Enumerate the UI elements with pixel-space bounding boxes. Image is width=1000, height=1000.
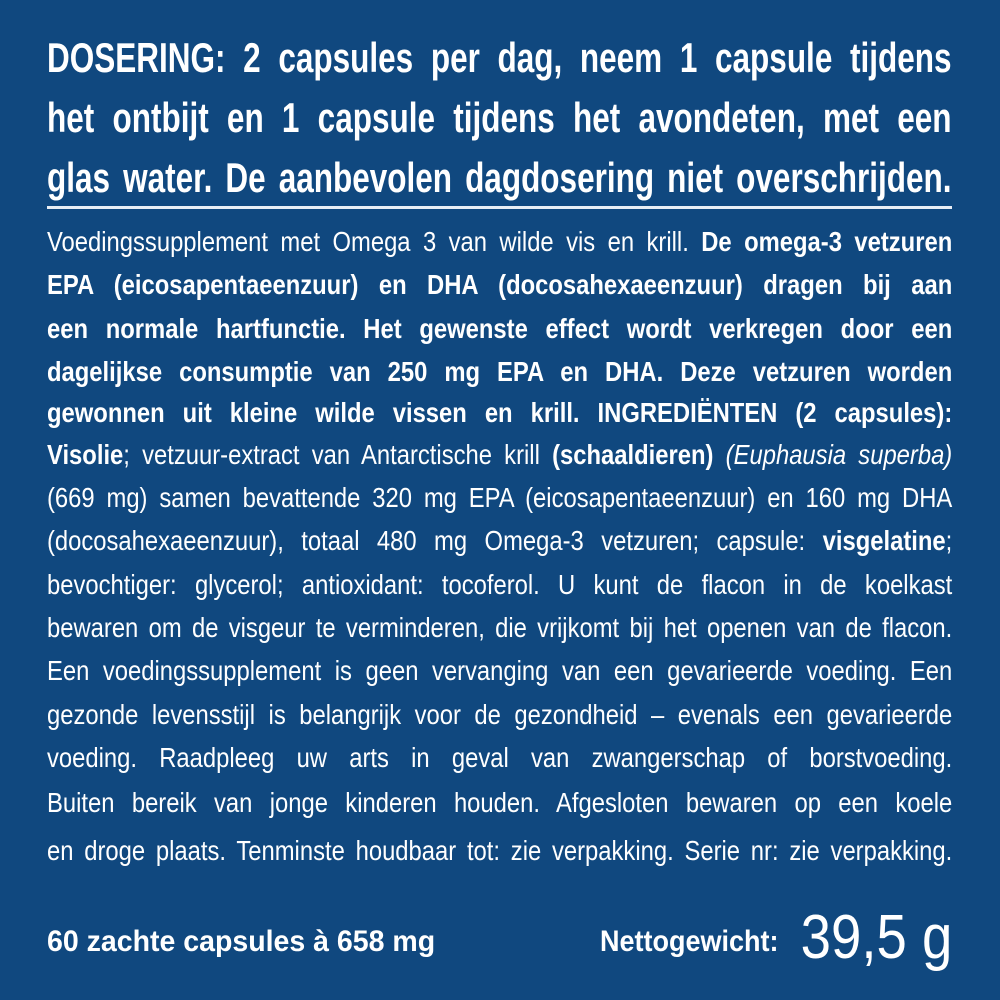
text block: product information: Een voedingssupplement is geen vervanging van een gevarieerde voeding. Een [47, 655, 952, 686]
title: dosage [47, 34, 952, 201]
footer: net weight value: 39,5 g [800, 903, 952, 972]
text block: product information: bevochtiger: glycerol; antioxidant: tocoferol. U kunt de flacon in de koelkast [47, 569, 952, 600]
title: dosage: DOSERING: 2 capsules per dag, neem 1 capsule tijdens [47, 34, 952, 81]
footer: capsule count: 60 zachte capsules à 658 mg [47, 925, 435, 958]
title: dosage: glas water. De aanbevolen dagdosering niet overschrijden. [47, 154, 952, 201]
text block: product information: bewaren om de visgeur te verminderen, die vrijkomt bij het openen van de flacon. [47, 612, 952, 643]
text block: product information: EPA (eicosapentaeenzuur) en DHA (docosahexaeenzuur) dragen bij aan [47, 269, 952, 300]
text block: product information: en droge plaats. Tenminste houdbaar tot: zie verpakking. Serie nr: zie verpakking. [47, 835, 952, 866]
text block: product information [47, 226, 952, 866]
text block: product information: Voedingssupplement met Omega 3 van wilde vis en krill. De omega-3 vetzuren [47, 226, 952, 257]
text block: product information: (docosahexaeenzuur), totaal 480 mg Omega-3 vetzuren; capsule: visgelatine; [47, 525, 952, 556]
text block: product information: Visolie; vetzuur-extract van Antarctische krill (schaaldieren) (Euphausia superba) [47, 439, 952, 470]
text block: product information: een normale hartfunctie. Het gewenste effect wordt verkregen door een [47, 313, 952, 344]
text block: product information: voeding. Raadpleeg uw arts in geval van zwangerschap of borstvoeding. [47, 742, 952, 773]
text block: product information: gezonde levensstijl is belangrijk voor de gezondheid – evenals een gevarieerde [47, 699, 952, 730]
text block: product information: gewonnen uit kleine wilde vissen en krill. INGREDIËNTEN (2 capsules): [47, 397, 952, 428]
footer: net weight label: Nettogewicht: [600, 925, 778, 958]
text block: product information: Buiten bereik van jonge kinderen houden. Afgesloten bewaren op een koele [47, 787, 952, 818]
text block: product information: dagelijkse consumptie van 250 mg EPA en DHA. Deze vetzuren worden [47, 356, 952, 387]
text block: product information: (669 mg) samen bevattende 320 mg EPA (eicosapentaeenzuur) en 160 mg DHA [47, 482, 952, 513]
title: dosage: het ontbijt en 1 capsule tijdens het avondeten, met een [47, 94, 952, 141]
